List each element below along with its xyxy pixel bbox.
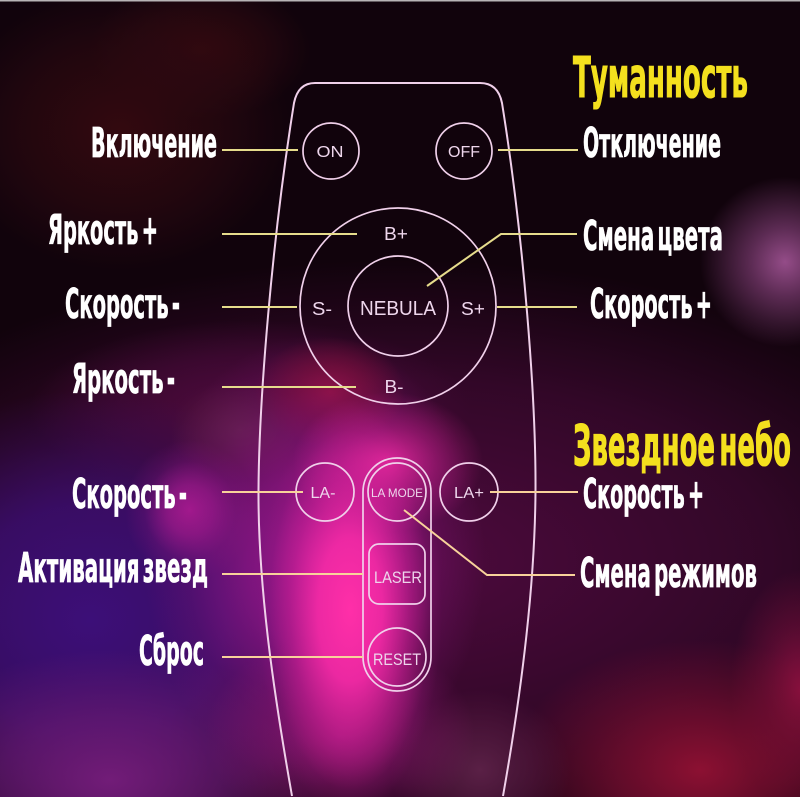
button: LASER: LASER [374, 568, 422, 587]
button: NEBULA [348, 256, 448, 356]
button: S+: S+ [461, 299, 485, 319]
text: Яркость + [48, 206, 158, 254]
button: LA- [296, 463, 354, 521]
star sky capsule [363, 458, 431, 691]
button: LA+: LA+ [454, 485, 484, 502]
button: ON: ON [316, 144, 344, 161]
button: B-: B- [384, 377, 404, 397]
text: Яркость - [72, 355, 175, 403]
button: LASER [369, 544, 425, 604]
button: RESET: RESET [373, 650, 421, 669]
button: S-: S- [312, 299, 332, 319]
button: OFF: OFF [448, 144, 480, 161]
text: Сброс [139, 627, 204, 675]
button: LA+ [440, 463, 498, 521]
button: RESET [368, 628, 426, 686]
text: Скорость - [72, 470, 187, 518]
button: OFF [436, 123, 492, 179]
text: Включение [91, 119, 217, 167]
text: Скорость - [65, 280, 180, 328]
button: LA MODE: LA MODE [371, 488, 423, 500]
remote control outline [258, 83, 536, 796]
button: NEBULA: NEBULA [360, 298, 437, 320]
button: ON [303, 123, 359, 179]
button: B+: B+ [384, 224, 408, 244]
button: LA-: LA- [310, 485, 336, 502]
button: LA MODE [368, 463, 426, 521]
text: Активация звезд [18, 544, 208, 592]
nebula control ring [300, 208, 496, 404]
leader lines [222, 150, 578, 657]
